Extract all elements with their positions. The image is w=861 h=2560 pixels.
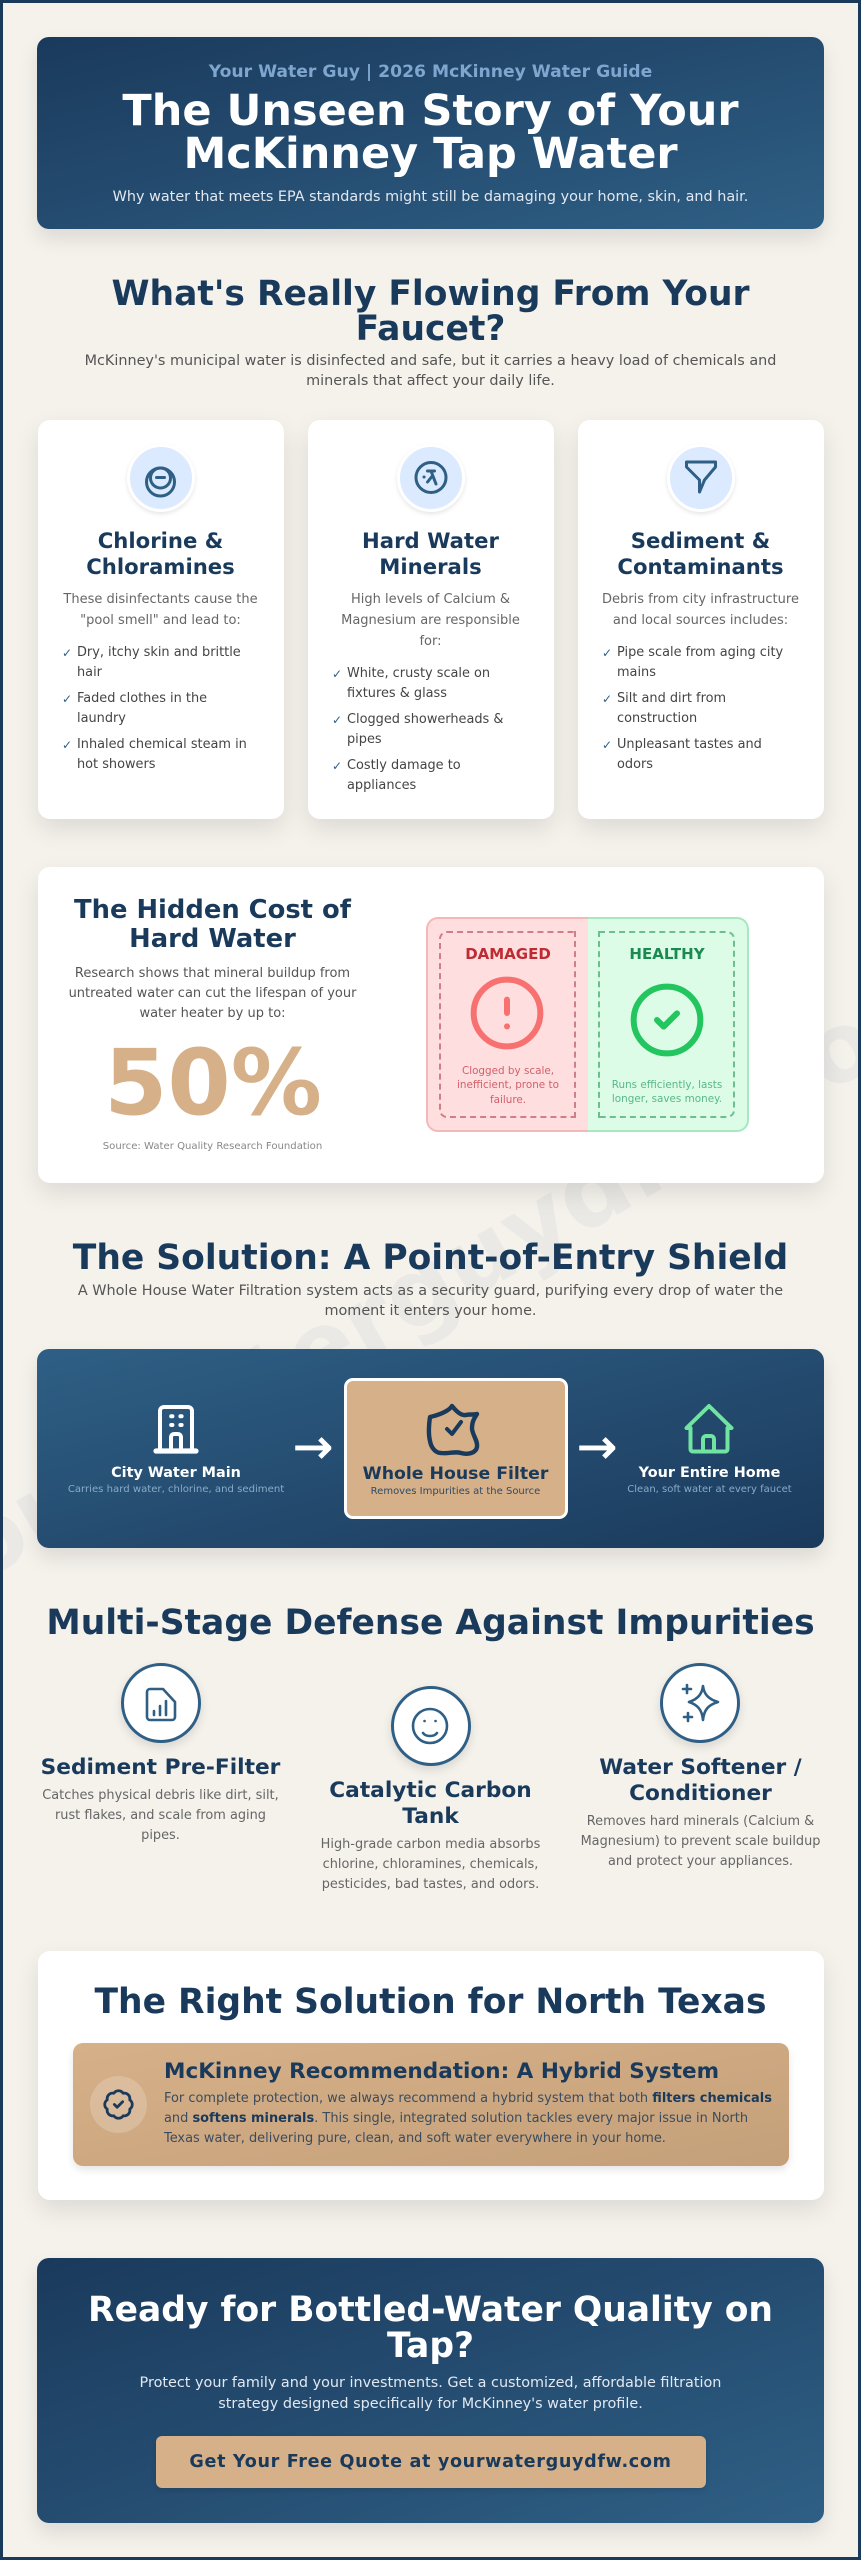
panel: hidden cost [38,867,824,1183]
card text [63,592,258,628]
list: ✓ [62,646,72,660]
list: Costly damage to [347,758,461,773]
comparison graphic [426,917,749,1132]
card text: These disinfectants cause the [63,592,258,607]
label: City Water Main [111,1465,241,1481]
stage text [42,1788,279,1843]
icon: smile [390,1686,470,1766]
intro text: minerals that affect your daily life. [306,373,555,389]
list: pipes [347,732,382,747]
cta heading: Ready for Bottled-Water Quality on [88,2290,773,2330]
icon: document [120,1663,200,1743]
card heading [362,528,499,579]
damaged text [457,1065,559,1106]
icon: sediment [666,444,734,512]
card heading: Sediment & [631,528,770,553]
stage text: rust flakes, and scale from aging [55,1808,266,1823]
stage: catalytic carbon [321,1686,540,1892]
list: Dry, itchy skin and brittle [77,645,241,660]
healthy side [588,917,748,1132]
panel: right solution [38,1951,824,2200]
cost heading: The Hidden Cost of [74,895,351,925]
card text: Magnesium are responsible [341,613,520,628]
list: fixtures & glass [347,686,447,701]
card text: Debris from city infrastructure [602,592,799,607]
stage heading: Catalytic Carbon [329,1778,532,1803]
list: ✓ [602,692,612,706]
card text [602,592,799,628]
box text [164,2091,772,2146]
caption: Removes Impurities at the Source [371,1486,540,1497]
panel: sediment [578,420,824,819]
stage text: pesticides, bad tastes, and odors. [322,1877,539,1892]
damaged text: inefficient, prone to [457,1079,559,1091]
healthy text: longer, saves money. [612,1093,722,1105]
healthy text: Runs efficiently, lasts [612,1079,722,1091]
list: appliances [347,778,416,793]
icon: building [153,1405,199,1454]
card heading: Contaminants [617,554,784,579]
card text: "pool smell" and lead to: [80,613,241,628]
stage heading [329,1778,532,1828]
list [62,645,247,772]
stage text: High-grade carbon media absorbs [321,1837,540,1852]
list: White, crusty scale on [347,666,490,681]
box text: Texas water, delivering pure, clean, and soft water everywhere in your home. [164,2131,666,2146]
cost heading [74,895,352,954]
icon: badge [90,2076,146,2133]
stage heading: Tank [402,1804,459,1828]
heading: what's flowing [111,274,750,348]
list: Clogged showerheads & [347,712,503,727]
card heading: Minerals [379,554,482,579]
cost text: water heater by up to: [139,1006,286,1021]
recommendation box [72,2043,788,2166]
cta text [140,2375,721,2412]
list: construction [617,711,697,726]
stage text: chlorine, chloramines, chemicals, [323,1857,538,1872]
icon: chlorine [126,444,194,512]
list: Silt and dirt from [617,691,726,706]
stage text: pipes. [141,1828,180,1843]
stage heading [599,1755,802,1806]
cta text: strategy designed specifically for McKinney's water profile. [218,2396,643,2412]
header banner [37,37,824,229]
stage heading: Conditioner [629,1780,772,1806]
heading: what's flowing: Faucet? [356,308,505,348]
box text: and softens minerals. This single, integrated solution tackles every major issue in North [164,2111,748,2126]
list: hair [77,665,102,680]
icon: shield [426,1404,480,1456]
healthy text [612,1079,722,1105]
header subtitle: Why water that meets EPA standards might still be damaging your home, skin, and hair. [113,189,748,205]
label: Whole House Filter [363,1464,548,1484]
step: whole house filter [344,1378,568,1519]
stage text: Removes hard minerals (Calcium & [587,1814,814,1829]
icon: sparkles [660,1663,740,1743]
step: city water main [68,1405,284,1495]
list [332,666,503,793]
list: Faded clothes in the [77,691,207,706]
icon: hard water [396,444,464,512]
main title: The Unseen Story of Your [122,86,739,136]
step: your entire home [627,1404,792,1495]
list: Unpleasant tastes and [617,737,762,752]
list: ✓ [332,667,342,681]
damaged text: failure. [490,1094,526,1106]
cost text: Research shows that mineral buildup from [75,966,350,981]
caption: Carries hard water, chlorine, and sediment [68,1484,284,1495]
cost text [69,966,356,1021]
list: hot showers [77,757,155,772]
arrow: → [293,1419,333,1475]
card heading: Chloramines [86,554,235,579]
card heading: Hard Water [362,528,499,553]
main title [122,86,739,179]
list: ✓ [62,692,72,706]
stage heading: Sediment Pre-Filter [41,1755,280,1780]
list: laundry [77,711,126,726]
list: ✓ [602,738,612,752]
arrow: → [577,1419,617,1475]
caption: Clean, soft water at every faucet [627,1484,792,1495]
heading: multi-stage: Multi-Stage Defense Against Impurities [46,1603,815,1643]
solution text [78,1283,783,1319]
stage text: Magnesium) to prevent scale buildup [581,1834,820,1849]
card text: and local sources includes: [613,613,788,628]
list: Inhaled chemical steam in [77,737,247,752]
damaged dashed box [438,931,576,1118]
cta text: Protect your family and your investments. Get a customized, affordable filtration [140,2375,721,2391]
list: ✓ [332,713,342,727]
stage: sediment pre-filter [41,1663,280,1843]
intro text [85,353,776,389]
damaged label: DAMAGED [465,945,551,963]
heading: what's flowing: What's Really Flowing From Your [111,274,750,314]
box text: For complete protection, we always recommend a hybrid system that both filters chemicals [164,2091,772,2106]
stage text: Catches physical debris like dirt, silt, [42,1788,279,1803]
cta button: Get Your Free Quote at yourwaterguydfw.com [189,2452,672,2472]
panel: chlorine [38,420,284,819]
list: mains [617,665,656,680]
stage text [581,1814,820,1869]
list: Pipe scale from aging city [617,645,783,660]
box heading: McKinney Recommendation: A Hybrid System [164,2059,719,2084]
list: ✓ [62,738,72,752]
list: ✓ [602,646,612,660]
stage heading: Water Softener / [599,1755,802,1780]
cta heading: Tap? [387,2326,474,2366]
source: Source: Water Quality Research Foundation [103,1141,322,1152]
icon: check [630,984,704,1056]
stat: 50%: 50% [104,1031,322,1136]
card heading [617,528,784,579]
panel: hard water [308,420,554,819]
healthy dashed box [598,931,735,1118]
solution text: moment it enters your home. [324,1303,536,1319]
list: ✓ [332,759,342,773]
header eyebrow: Your Water Guy | 2026 McKinney Water Guide [209,62,652,82]
panel: call to action [37,2258,824,2523]
card text: for: [419,634,442,649]
icon: warning [470,976,544,1050]
card text [341,592,520,649]
healthy label: HEALTHY [629,945,705,963]
card heading [86,528,235,579]
damaged text: Clogged by scale, [462,1065,554,1077]
panel heading: The Right Solution for North Texas [94,1982,766,2022]
stage: softener [581,1663,820,1869]
main title: McKinney Tap Water [183,129,678,179]
card text: High levels of Calcium & [351,592,510,607]
label: Your Entire Home [639,1465,780,1481]
card heading: Chlorine & [98,528,223,553]
stage text: and protect your appliances. [608,1854,793,1869]
heading: solution: The Solution: A Point-of-Entry Shield [73,1238,788,1278]
panel: flow diagram [37,1349,824,1548]
damaged side [426,917,588,1132]
list: odors [617,757,653,772]
solution text: A Whole House Water Filtration system acts as a security guard, purifying every drop of water the [78,1283,783,1299]
icon: house [684,1404,734,1454]
intro text: McKinney's municipal water is disinfected and safe, but it carries a heavy load of chemicals and [85,353,776,369]
cta button [156,2436,706,2488]
stage text [321,1837,540,1892]
cost heading: Hard Water [129,924,296,954]
cost text: untreated water can cut the lifespan of your [69,986,356,1001]
cta heading [88,2290,773,2366]
list [602,645,783,772]
